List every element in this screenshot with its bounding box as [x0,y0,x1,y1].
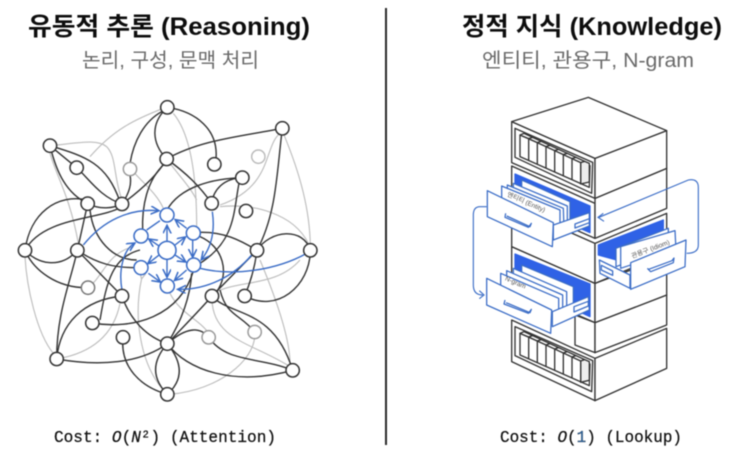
top closed drawer with folders [515,128,593,193]
heading: reasoning title: 유동적 추론 (Reasoning) [28,13,310,41]
faint network nodes [81,150,265,344]
heading: reasoning subtitle: 논리, 구성, 문맥 처리 [82,49,259,72]
dark network nodes [18,101,317,401]
blue attention arrows [83,210,307,290]
open drawer: idiom: 관용구 (Idiom) [630,237,671,260]
blue central nodes [134,208,201,293]
open drawer: entity [487,174,590,247]
chart: filing cabinet [473,97,698,401]
arrow: lookup from left drawer to lower drawer [473,207,487,299]
heading: knowledge title: 정적 지식 (Knowledge) [462,13,722,41]
bottom closed drawer with folders [515,327,593,392]
cost label: lookup: Cost: O(1) (Lookup) [500,429,682,448]
center divider [385,8,387,445]
open drawer: entity: 엔티티 (Entity) [506,190,547,214]
dark network edges [25,107,310,394]
arrow: lookup from right drawer to top tier [598,180,698,253]
heading: knowledge subtitle: 엔티티, 관용구, N-gram [482,49,694,72]
open drawer: n-gram [487,254,590,333]
open drawer: idiom [598,220,686,289]
cabinet body tiers [512,97,667,401]
cost label: attention: Cost: O(N²) (Attention) [54,429,276,448]
open drawer: n-gram: N-gram [504,275,527,291]
faint background edges [25,108,310,394]
chart: attention network graph [18,101,317,401]
